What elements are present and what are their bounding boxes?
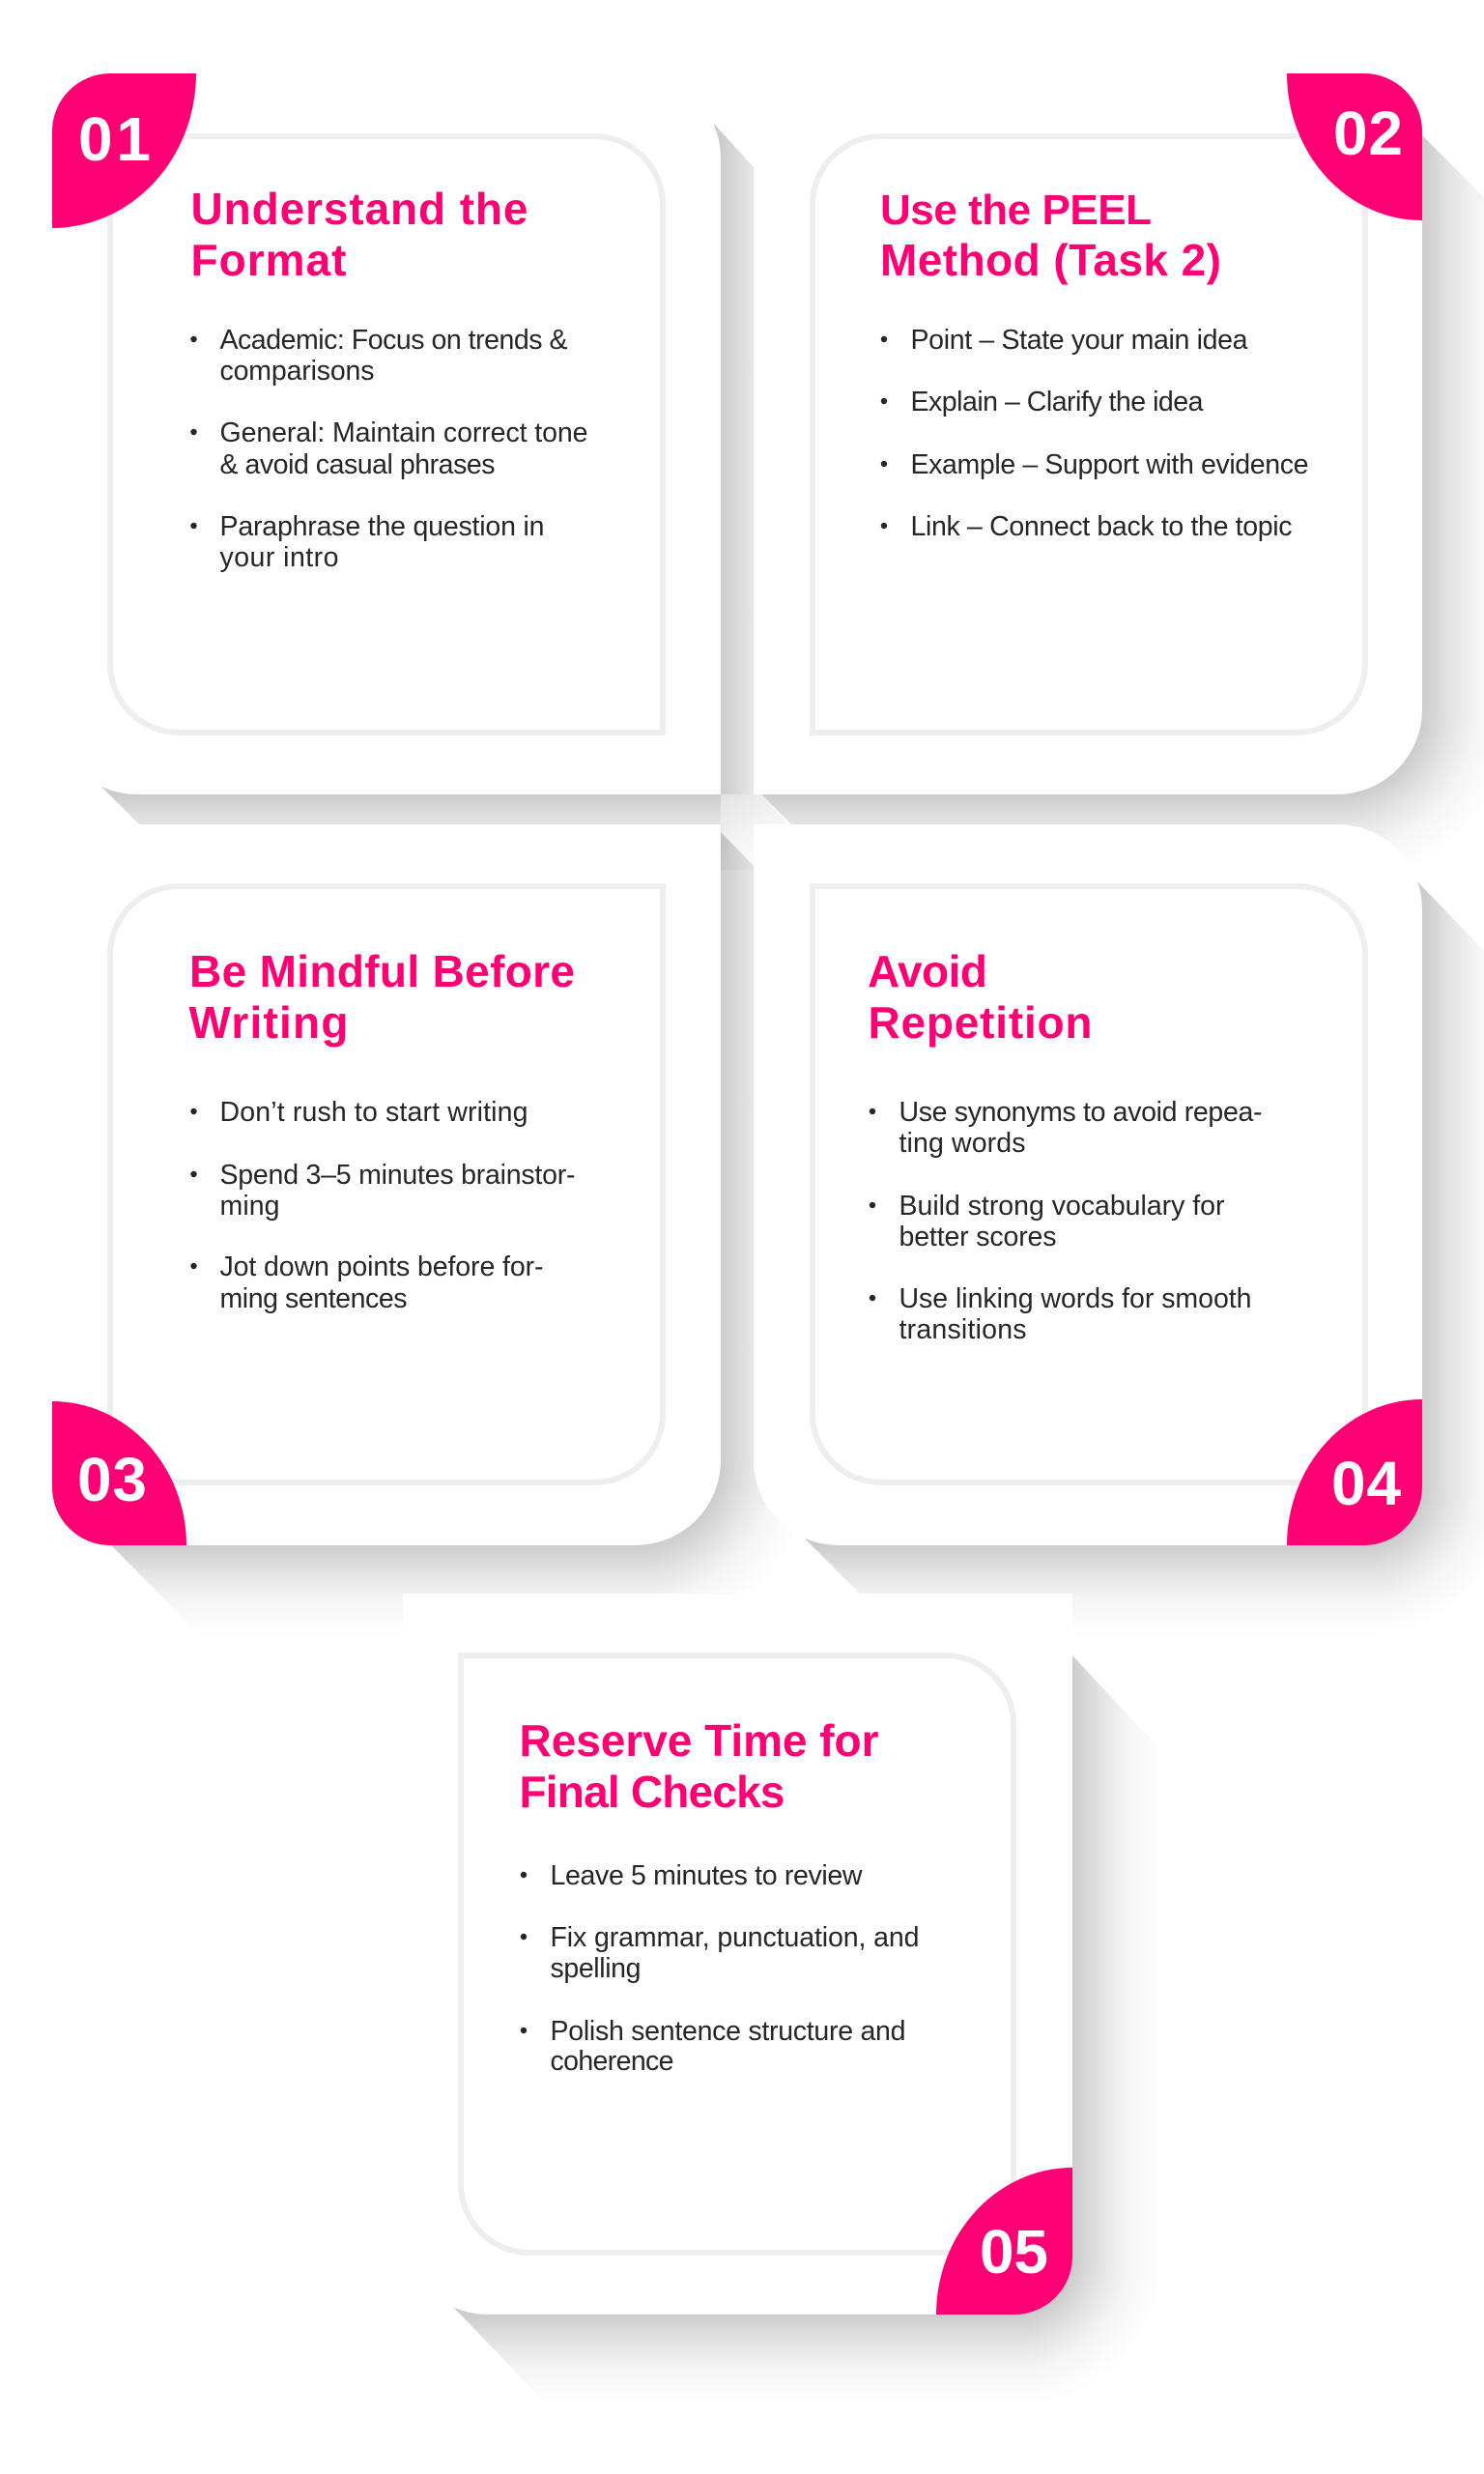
heading: Be Mindful Before Writing — [189, 946, 575, 1048]
bullet list: better scores — [899, 1222, 1057, 1252]
heading: Use the PEEL Method (Task 2): Use the PEEL — [880, 187, 1152, 234]
heading: Use the PEEL Method (Task 2) — [880, 187, 1221, 285]
number badge 01 — [52, 73, 196, 228]
bullet list: Build strong vocabulary for — [899, 1191, 1225, 1222]
bullet list: your intro — [220, 542, 338, 573]
panel: 03 Be Mindful Before Writing — [52, 824, 813, 1637]
bullet list: ting words — [899, 1128, 1026, 1159]
bullet list: Paraphrase the question in — [220, 511, 545, 542]
number badge 02: 02 — [1333, 99, 1403, 168]
bullet list: Don’t rush to start writing — [220, 1097, 528, 1128]
bullet list: Jot down points before for- — [220, 1251, 543, 1282]
heading: Avoid Repetition — [868, 946, 1092, 1048]
heading: Avoid Repetition: Avoid — [868, 946, 987, 996]
bullet list: Use linking words for smooth — [899, 1283, 1252, 1314]
bullet list: General: Maintain correct tone — [220, 417, 587, 448]
number badge 03: 03 — [77, 1445, 147, 1514]
bullet list — [190, 325, 588, 573]
heading: Reserve Time for Final Checks: Final Checks — [520, 1767, 785, 1817]
bullet list: Polish sentence structure and — [551, 2016, 906, 2047]
number badge 01: 01 — [78, 104, 151, 174]
bullet list — [881, 325, 1308, 542]
number badge 04 — [1287, 1399, 1422, 1545]
heading: Be Mindful Before Writing: Be Mindful Before — [189, 946, 575, 996]
bullet list: Point – State your main idea — [910, 325, 1248, 356]
bullet list: Use synonyms to avoid repea- — [899, 1097, 1262, 1128]
bullet list: spelling — [551, 1953, 642, 1984]
bullet list: Example – Support with evidence — [910, 449, 1308, 480]
panel: 05 Reserve Time for Final Checks — [403, 1594, 1164, 2406]
bullet list: Academic: Focus on trends & — [220, 325, 568, 356]
bullet list — [870, 1097, 1262, 1345]
bullet list: Explain – Clarify the idea — [910, 387, 1204, 417]
number badge 05 — [936, 2168, 1072, 2315]
bullet list: ming — [220, 1191, 280, 1222]
heading: Use the PEEL Method (Task 2): Method (Task 2) — [880, 235, 1221, 285]
heading: Understand the Format: Format — [191, 235, 346, 285]
heading: Understand the Format — [191, 184, 528, 285]
bullet list: Leave 5 minutes to review — [551, 1860, 863, 1891]
bullet list: comparisons — [220, 356, 375, 387]
bullet list: ming sentences — [220, 1283, 408, 1314]
number badge 05: 05 — [980, 2217, 1048, 2287]
heading: Be Mindful Before Writing: Writing — [189, 997, 348, 1048]
number badge 03 — [52, 1401, 186, 1545]
heading: Reserve Time for Final Checks — [520, 1715, 879, 1817]
number badge 04: 04 — [1331, 1449, 1401, 1518]
bullet list: Link – Connect back to the topic — [910, 511, 1293, 542]
bullet list: coherence — [551, 2046, 674, 2077]
heading: Reserve Time for Final Checks: Reserve Time for — [520, 1715, 879, 1766]
bullet list — [521, 1860, 920, 2077]
bullet list: & avoid casual phrases — [220, 449, 495, 480]
bullet list: transitions — [899, 1314, 1026, 1345]
bullet list — [190, 1097, 576, 1314]
bullet list: Spend 3–5 minutes brainstor- — [220, 1160, 576, 1191]
panel: 02 Use the PEEL Method — [754, 73, 1484, 886]
bullet list: Fix grammar, punctuation, and — [551, 1922, 920, 1953]
heading: Avoid Repetition: Repetition — [868, 997, 1092, 1048]
panel: 04 Avoid Repetition — [754, 824, 1484, 1637]
heading: Understand the Format: Understand the — [191, 184, 528, 234]
number badge 02 — [1287, 73, 1422, 220]
panel: 01 Understand the Format — [52, 73, 813, 886]
